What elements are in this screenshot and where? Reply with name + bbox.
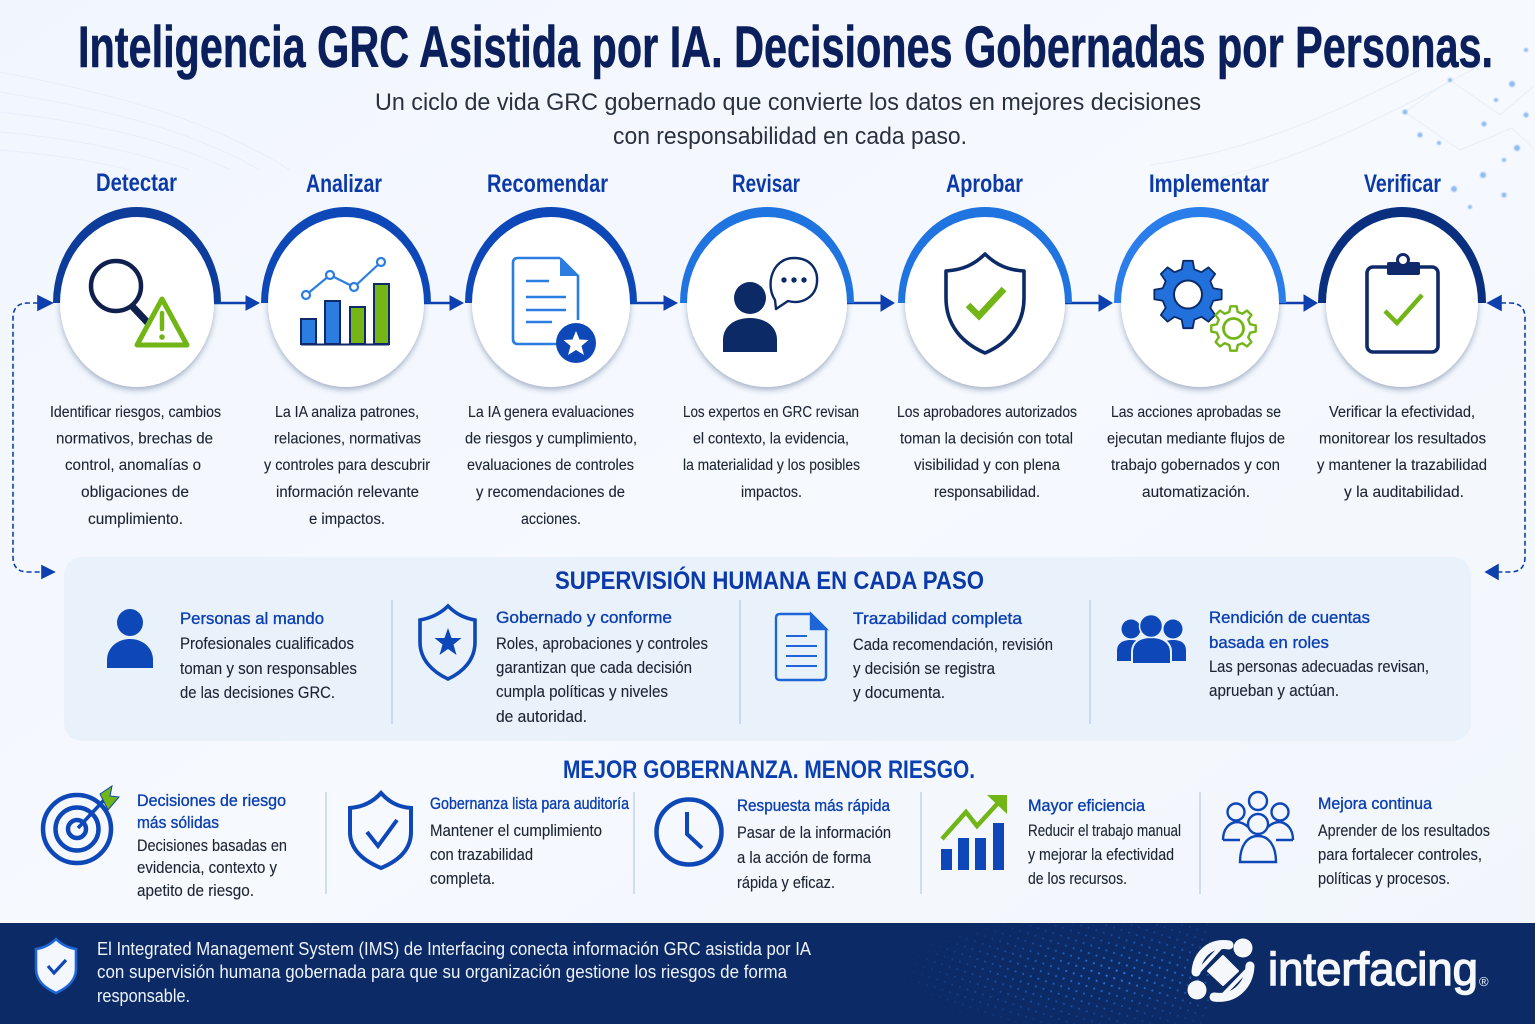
text: personas al mando: toman y son responsables [180,660,357,678]
arrow: feedback loop right [1486,296,1525,579]
description: automatización. [1142,484,1250,501]
arrow: implementar to verificar [1279,295,1317,311]
text: Aprender de los resultados [1318,822,1490,840]
footer text [97,939,811,1006]
subtitle [375,89,1201,150]
footer band [0,923,1535,1024]
subtitle: con responsabilidad en cada paso. [613,123,967,150]
text: Pasar de la información [737,824,891,842]
description: Los aprobadores autorizados [897,404,1077,421]
description: evaluaciones de controles [467,457,634,474]
logo: interfacing: interfacing [1268,943,1478,995]
benefit: decisiones de riesgo [43,786,287,900]
icon: target [43,786,119,863]
text: evidencia, contexto y [137,859,278,877]
text: gobernado y conforme: garantizan que cada decisión [496,659,692,677]
icon: shield with star [420,606,475,679]
text: más sólidas [137,813,219,832]
text: rendicion de cuentas [1209,608,1429,700]
text: Mejora continua [1318,794,1433,813]
logo: interfacing: ® [1479,974,1489,989]
text: personas al mando [180,609,357,702]
text: trazabilidad completa: Cada recomendación, revisión [853,636,1053,654]
description [1317,404,1487,501]
description: Identificar riesgos, cambios [50,404,221,421]
circle badge [1318,207,1486,387]
step: Detectar [50,169,221,528]
text: Respuesta más rápida [737,796,890,815]
description: el contexto, la evidencia, [693,430,849,448]
text: para fortalecer controles, [1318,846,1482,864]
description: ejecutan mediante flujos de [1107,430,1285,448]
step: Analizar [261,170,431,528]
step: Implementar [1107,170,1286,501]
text: con trazabilidad [430,846,533,864]
footer text: responsable. [97,986,190,1006]
description: y la auditabilidad. [1344,484,1464,501]
circle badge [1114,207,1286,387]
heading: Recomendar [487,170,608,198]
circle badge [898,207,1072,387]
description: cumplimiento. [88,511,183,528]
text: apetito de riesgo. [137,882,254,900]
text: Reducir el trabajo manual [1028,822,1181,840]
icon: document with star [513,258,596,363]
heading: Detectar [96,169,177,197]
text: Decisiones de riesgo [137,791,286,810]
circle badge [680,207,854,387]
text: gobernado y conforme [496,608,708,726]
description: la materialidad y los posibles [683,457,860,474]
icon: expert with speech bubble [723,258,817,352]
description: control, anomalías o [65,457,201,474]
description: La IA analiza patrones, [275,404,419,421]
text: rendicion de cuentas: Las personas adecuadas revisan, [1209,658,1429,676]
description: La IA genera evaluaciones [468,404,634,421]
text: de los recursos. [1028,870,1127,888]
icon: shield check [350,793,411,868]
description [465,404,637,528]
heading: Implementar [1149,170,1269,198]
heading: Revisar [732,170,800,198]
text: personas al mando: Personas al mando [180,609,324,628]
text: completa. [430,870,495,888]
arrow: feedback loop left [13,296,54,578]
description: Verificar la efectividad, [1329,404,1475,421]
benefit: gobernanza lista [350,793,629,888]
icon: clipboard with check [1367,254,1438,352]
text: gobernado y conforme: Roles, aprobaciones y controles [496,635,708,653]
text [737,796,891,892]
text: trazabilidad completa: y documenta. [853,684,945,702]
text: trazabilidad completa [853,609,1053,702]
description [897,404,1077,501]
text: rendicion de cuentas: aprueban y actúan. [1209,682,1339,700]
description [264,404,431,528]
description: Las acciones aprobadas se [1111,404,1281,421]
description: obligaciones de [81,484,189,501]
text: personas al mando: Profesionales cualificados [180,635,354,653]
description: acciones. [521,511,581,528]
text: personas al mando: de las decisiones GRC. [180,684,335,702]
text: rendicion de cuentas: basada en roles [1209,633,1329,652]
description: y mantener la trazabilidad [1317,457,1487,474]
icon: team [1117,614,1186,664]
step: Revisar [680,170,860,501]
text: rápida y eficaz. [737,874,835,892]
icon: team outline [1223,792,1293,862]
description [683,404,860,501]
description: y recomendaciones de [476,484,625,501]
icon: footer shield [36,939,76,993]
text: a la acción de forma [737,849,872,867]
arrow: detectar to analizar [214,296,259,310]
text: Mantener el cumplimiento [430,822,602,840]
circle badge [53,207,221,387]
description: información relevante [276,484,419,501]
text: Mayor eficiencia [1028,796,1146,815]
heading: Aprobar [946,170,1023,198]
text [137,791,287,900]
text: Gobernanza lista para auditoría [430,794,629,813]
description: responsabilidad. [934,484,1040,501]
text [1318,794,1490,888]
icon: bar and line chart [301,258,389,344]
text: rendicion de cuentas: Rendición de cuentas [1209,608,1370,627]
text: trazabilidad completa: Trazabilidad completa [853,609,1023,628]
description: normativos, brechas de [56,430,213,448]
panel: supervision humana [64,557,1471,741]
text: gobernado y conforme: Gobernado y conforme [496,608,672,627]
benefit: mayor eficiencia [941,795,1181,888]
heading: Analizar [306,170,382,198]
benefit: mejora continua [1223,792,1490,888]
text: Decisiones basadas en [137,837,287,855]
text [430,794,629,888]
description: relaciones, normativas [274,430,421,448]
heading: mejor gobernanza: MEJOR GOBERNANZA. MENOR RIESGO. [563,756,975,784]
text [1028,796,1181,888]
description: de riesgos y cumplimiento, [465,430,637,448]
arrow: revisar to aprobar [847,295,894,311]
heading: Verificar [1364,170,1441,198]
step: Aprobar [897,170,1077,501]
icon: clock [656,800,722,864]
description: trabajo gobernados y con [1111,457,1280,474]
icon: document [776,614,826,680]
text: políticas y procesos. [1318,870,1450,888]
text: y mejorar la efectividad [1028,846,1174,864]
description: monitorear los resultados [1319,430,1486,448]
text: gobernado y conforme: cumpla políticas y niveles [496,683,668,701]
description [1107,404,1285,501]
step: Verificar [1317,170,1487,501]
arrow: aprobar to implementar [1065,295,1112,311]
description: impactos. [741,484,802,501]
icon: person [107,609,153,668]
heading: SUPERVISIÓN HUMANA EN CADA PASO [555,565,984,595]
step: Recomendar [465,170,637,528]
description: Los expertos en GRC revisan [683,404,859,421]
description [50,404,221,528]
logo: interfacing [1188,938,1489,1000]
circle badge [465,207,637,387]
footer text: El Integrated Management System (IMS) de Interfacing conecta información GRC asistida por IA [97,939,811,959]
icon: magnifier with warning [91,261,187,345]
circle badge [261,207,431,387]
description: y controles para descubrir [264,457,431,474]
subtitle: Un ciclo de vida GRC gobernado que convierte los datos en mejores decisiones [375,89,1201,116]
icon: shield with check [946,254,1024,353]
description: toman la decisión con total [900,430,1073,448]
description: e impactos. [309,511,385,528]
icon: growth chart [941,795,1007,870]
text: trazabilidad completa: y decisión se registra [853,660,996,678]
arrow: recomendar to revisar [630,296,677,310]
icon: gears [1154,261,1256,351]
arrow: analizar to recomendar [424,296,463,310]
description: visibilidad y con plena [914,457,1060,474]
text: gobernado y conforme: de autoridad. [496,708,587,726]
footer text: con supervisión humana gobernada para que su organización gestione los riesgos de forma [97,962,788,982]
benefit: respuesta rapida [656,796,891,892]
